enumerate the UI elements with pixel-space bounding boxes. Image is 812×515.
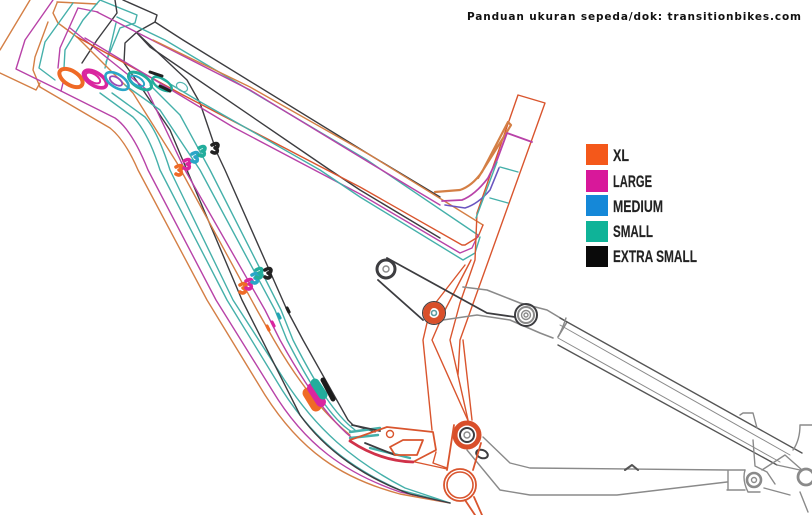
top tube upper edges (97, 12, 483, 235)
legend item: XL: XL (613, 146, 629, 165)
ovals near head tube (56, 65, 189, 94)
down tube lower edges (40, 63, 450, 503)
head tube outlines per size (0, 0, 157, 91)
seat stay (558, 318, 802, 465)
legend item: Medium: MEDIUM (613, 197, 663, 216)
middle cable guides (240, 268, 271, 293)
lower link bracket (350, 425, 447, 469)
rear dropout and axles (740, 413, 812, 512)
small colored marks on down tube (267, 308, 289, 330)
bottle mount block (308, 380, 333, 406)
main pivot and bottom bracket (444, 423, 489, 515)
rocker link and shock outline (377, 258, 537, 326)
legend item: Large: LARGE (613, 172, 652, 191)
size legend (586, 144, 697, 267)
legend item: Small: SMALL (613, 222, 653, 241)
rocker pivot (422, 302, 446, 324)
rocker link body in grey (443, 287, 567, 338)
upper cable guides (176, 144, 218, 175)
source credit text: Panduan ukuran sepeda/dok: transitionbikes.com (467, 11, 801, 23)
legend item: Extra Small: EXTRA SMALL (613, 247, 697, 266)
seat tube and gussets (423, 95, 545, 430)
down tube upper edges (70, 28, 375, 438)
chain stay (467, 437, 745, 495)
top tube lower edges (77, 33, 483, 260)
